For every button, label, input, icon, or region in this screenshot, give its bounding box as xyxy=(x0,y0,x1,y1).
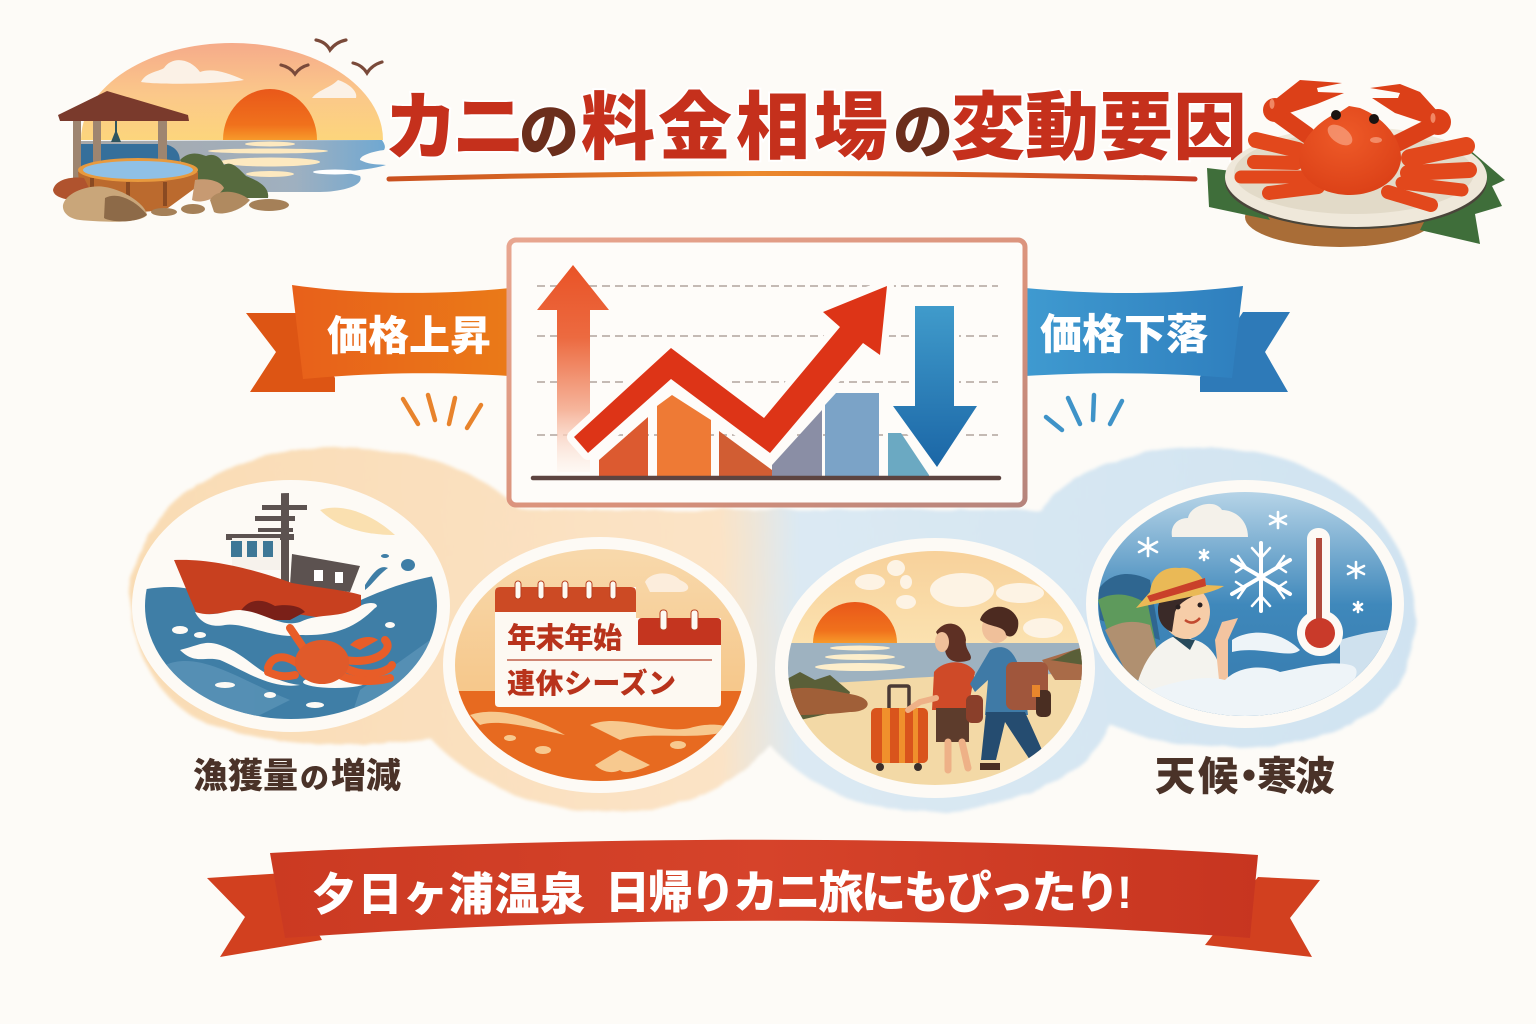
hull xyxy=(174,560,361,620)
emphasis ticks: rise xyxy=(403,395,481,428)
straw hat xyxy=(1136,568,1224,608)
sand xyxy=(789,674,1082,785)
ribbon tail xyxy=(246,313,335,392)
ribbon body xyxy=(1025,286,1243,378)
calendar text: 年末年始 xyxy=(507,622,622,655)
ribbon tail xyxy=(1200,312,1290,392)
plate xyxy=(1225,133,1487,229)
sand ripples xyxy=(470,712,730,772)
rings xyxy=(515,581,698,630)
calendar: 連休シーズン xyxy=(507,667,676,699)
cloud xyxy=(1172,504,1248,537)
mast and rigging xyxy=(226,493,307,582)
spray xyxy=(365,554,415,590)
sun xyxy=(813,602,897,643)
tub staves xyxy=(92,178,165,210)
chart frame xyxy=(509,240,1025,505)
crab highlights xyxy=(1270,99,1436,150)
factor: holiday season xyxy=(443,530,764,801)
badge xyxy=(1086,480,1404,728)
ribbon label: 価格下落 xyxy=(1040,311,1208,358)
shrubs xyxy=(180,154,268,198)
winter scene xyxy=(1098,492,1392,716)
wooden tub xyxy=(78,172,198,212)
title: カニの料金相場の変動要因 xyxy=(384,86,1247,169)
suitcase xyxy=(871,686,928,771)
birds xyxy=(281,40,382,74)
ribbon: price fall xyxy=(1025,286,1290,392)
bars xyxy=(599,393,929,478)
small snowflakes xyxy=(1139,512,1364,612)
head xyxy=(1168,594,1210,639)
ribbon body xyxy=(270,840,1258,938)
bottom ribbon xyxy=(207,840,1320,957)
calendar header xyxy=(495,587,636,612)
gazebo posts xyxy=(73,120,167,190)
cabin xyxy=(290,554,360,592)
crab in sea xyxy=(268,628,392,684)
gazebo roof xyxy=(58,91,189,121)
crab body xyxy=(1299,106,1401,195)
tub rim and water xyxy=(78,158,198,182)
ribbon body xyxy=(292,285,510,379)
wheelhouse xyxy=(232,538,280,570)
beach scene xyxy=(788,551,1082,785)
sea xyxy=(775,643,1095,693)
sea xyxy=(80,140,386,192)
crab eyes xyxy=(1331,110,1379,124)
factor: travel demand xyxy=(775,538,1095,800)
crab arms xyxy=(1275,112,1436,143)
watercolor wash behind factor circles xyxy=(130,448,1416,812)
rocks xyxy=(53,178,289,222)
title underline xyxy=(389,174,1195,179)
wooden base xyxy=(1245,187,1435,247)
cloud xyxy=(645,573,688,592)
sea behind gazebo xyxy=(80,144,180,170)
label: weather and cold wave: 天候・寒波 xyxy=(1155,755,1335,799)
sun reflection xyxy=(208,142,357,177)
thermometer xyxy=(1297,528,1343,656)
calendar xyxy=(495,581,721,707)
crab claws xyxy=(1263,80,1451,135)
sea xyxy=(145,576,437,719)
lighter sea patches xyxy=(165,640,430,720)
calendar second header xyxy=(638,618,721,645)
badge xyxy=(132,480,450,732)
label: catch volume: 漁獲量の増減 xyxy=(193,757,401,796)
factor: weather and cold wave xyxy=(1086,480,1410,740)
setting sun xyxy=(223,89,317,140)
trend arrow xyxy=(574,286,887,453)
clouds xyxy=(141,60,356,98)
ribbon text, first phrase: 夕日ヶ浦温泉 xyxy=(312,869,585,920)
baseline xyxy=(533,476,999,480)
ship scene xyxy=(145,493,437,719)
factor: catch volume xyxy=(130,480,450,740)
orange sea xyxy=(458,691,742,781)
ribbon text, second phrase: 日帰りカニ旅にもぴったり! xyxy=(605,867,1132,918)
badge xyxy=(775,538,1095,798)
up arrow xyxy=(537,265,609,472)
woman xyxy=(908,624,983,770)
header illustration: onsen at sunset xyxy=(53,40,390,222)
crab on a plate xyxy=(1207,80,1505,247)
leaves xyxy=(1207,150,1505,244)
down arrow xyxy=(893,306,977,467)
arm pointing xyxy=(1215,618,1238,680)
emphasis ticks: fall xyxy=(1046,395,1122,430)
hills xyxy=(1098,574,1160,640)
bell xyxy=(111,120,121,142)
clouds xyxy=(855,560,1063,638)
snowflake xyxy=(1232,543,1290,611)
badge xyxy=(443,537,757,793)
crab legs xyxy=(1241,140,1469,205)
snow drifts xyxy=(1150,630,1388,716)
ribbon tails xyxy=(207,873,1320,957)
ribbon label: 価格上昇 xyxy=(327,313,491,359)
person body xyxy=(1138,636,1219,700)
white waves xyxy=(172,603,395,708)
ribbon: price rise xyxy=(246,285,510,392)
sky dome xyxy=(80,40,390,140)
seasonal scene xyxy=(455,549,745,781)
chart panel xyxy=(509,240,1025,505)
man xyxy=(970,607,1051,770)
rocks and shrubs xyxy=(785,672,850,720)
